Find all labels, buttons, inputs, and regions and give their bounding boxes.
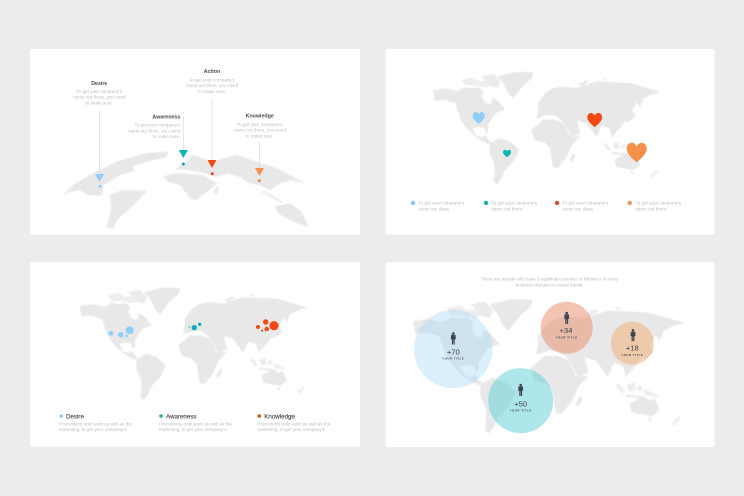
intro text: There are people who have a significant number of followers in every — [481, 277, 619, 282]
circle: +34 — [541, 302, 593, 354]
panel: curved map with callouts — [30, 49, 360, 234]
callout: Awareness: To get your company's — [134, 123, 181, 128]
legend item: blue: name out there. — [418, 206, 450, 211]
callout: Desire: Desire — [91, 81, 107, 87]
circle: +50: YOUR TITLE — [510, 409, 532, 413]
callout: Knowledge: name out there, you need — [234, 128, 286, 133]
circle: +18: +18 — [626, 343, 639, 352]
legend item: teal: name out there. — [491, 206, 523, 211]
callout: Desire: name out there, you need — [73, 95, 126, 100]
circle: +34: +34 — [560, 326, 572, 335]
callout: Desire — [73, 81, 126, 188]
callout: Action: To get your company's — [189, 77, 236, 82]
curved world map — [63, 152, 308, 228]
legend item: blue: To get your company's — [418, 201, 465, 206]
callout: Desire: To get your company's — [76, 89, 123, 94]
world map — [413, 300, 683, 433]
circle: +50 — [488, 368, 553, 433]
icon: teal heart — [503, 150, 511, 157]
legend: Knowledge: marketing, to get your company's. — [257, 427, 326, 432]
circle: +70: YOUR TITLE — [442, 357, 464, 361]
legend: Awareness: Promotions only work as well as the — [159, 421, 232, 426]
circle: +70 — [414, 310, 493, 388]
legend item: red — [555, 201, 609, 211]
legend item: red: To get your company's — [562, 201, 609, 206]
callout: Awareness: to make sure. — [152, 134, 180, 139]
panel: hearts map — [386, 49, 714, 234]
legend: Desire: Promotions only work as well as the — [59, 421, 132, 426]
callout: Action: Action — [204, 69, 220, 75]
teal bubbles — [189, 323, 201, 330]
legend item: teal — [484, 201, 538, 211]
legend: Awareness — [159, 413, 232, 432]
legend: Knowledge: Knowledge — [264, 413, 295, 420]
callout: Knowledge: Knowledge — [246, 114, 274, 120]
panel: follower circles — [386, 262, 714, 447]
circle: +18 — [611, 322, 654, 365]
callout: Awareness: Awareness — [152, 114, 180, 120]
callout: Desire: to make sure. — [85, 100, 113, 105]
callout: Awareness: name out there, you need — [128, 128, 181, 133]
red bubbles — [256, 319, 279, 332]
legend: Knowledge — [257, 413, 331, 432]
intro text: business domain on social media. — [516, 282, 583, 287]
blue bubbles — [109, 326, 134, 337]
legend item: orange — [628, 201, 682, 211]
legend: Desire — [59, 413, 132, 432]
callout: Action — [186, 69, 239, 175]
callout: Knowledge — [234, 114, 286, 182]
legend: Desire: marketing, to get your company's. — [59, 427, 128, 432]
circle: +34: YOUR TITLE — [556, 335, 578, 339]
icon: orange heart — [627, 143, 647, 162]
callout: Knowledge: to make sure. — [246, 133, 274, 138]
intro text — [481, 277, 619, 287]
legend: Knowledge: Promotions only work as well as the — [257, 421, 331, 426]
circle: +70: +70 — [447, 347, 460, 356]
legend: Awareness: marketing, to get your company's. — [159, 427, 228, 432]
callout: Action: to make sure. — [198, 89, 226, 94]
legend: Desire: Desire — [66, 413, 84, 420]
legend item: red: name out there. — [562, 206, 594, 211]
circle: +50: +50 — [514, 399, 527, 408]
icon: blue heart — [473, 112, 485, 124]
icon: red heart — [587, 113, 602, 127]
circle: +18: YOUR TITLE — [621, 353, 643, 357]
legend item: teal: To get your company's — [491, 201, 538, 206]
world map — [80, 288, 307, 400]
callout: Awareness — [128, 114, 188, 166]
legend: Awareness: Awareness — [166, 413, 196, 420]
panel: bubble map — [30, 262, 360, 446]
legend item: orange: To get your company's — [635, 201, 682, 206]
callout: Knowledge: To get your company's — [237, 122, 283, 127]
legend item: orange: name out there. — [635, 206, 667, 211]
callout: Action: name out there, you need — [186, 83, 239, 88]
world map — [433, 72, 660, 184]
legend item: blue — [411, 201, 465, 211]
